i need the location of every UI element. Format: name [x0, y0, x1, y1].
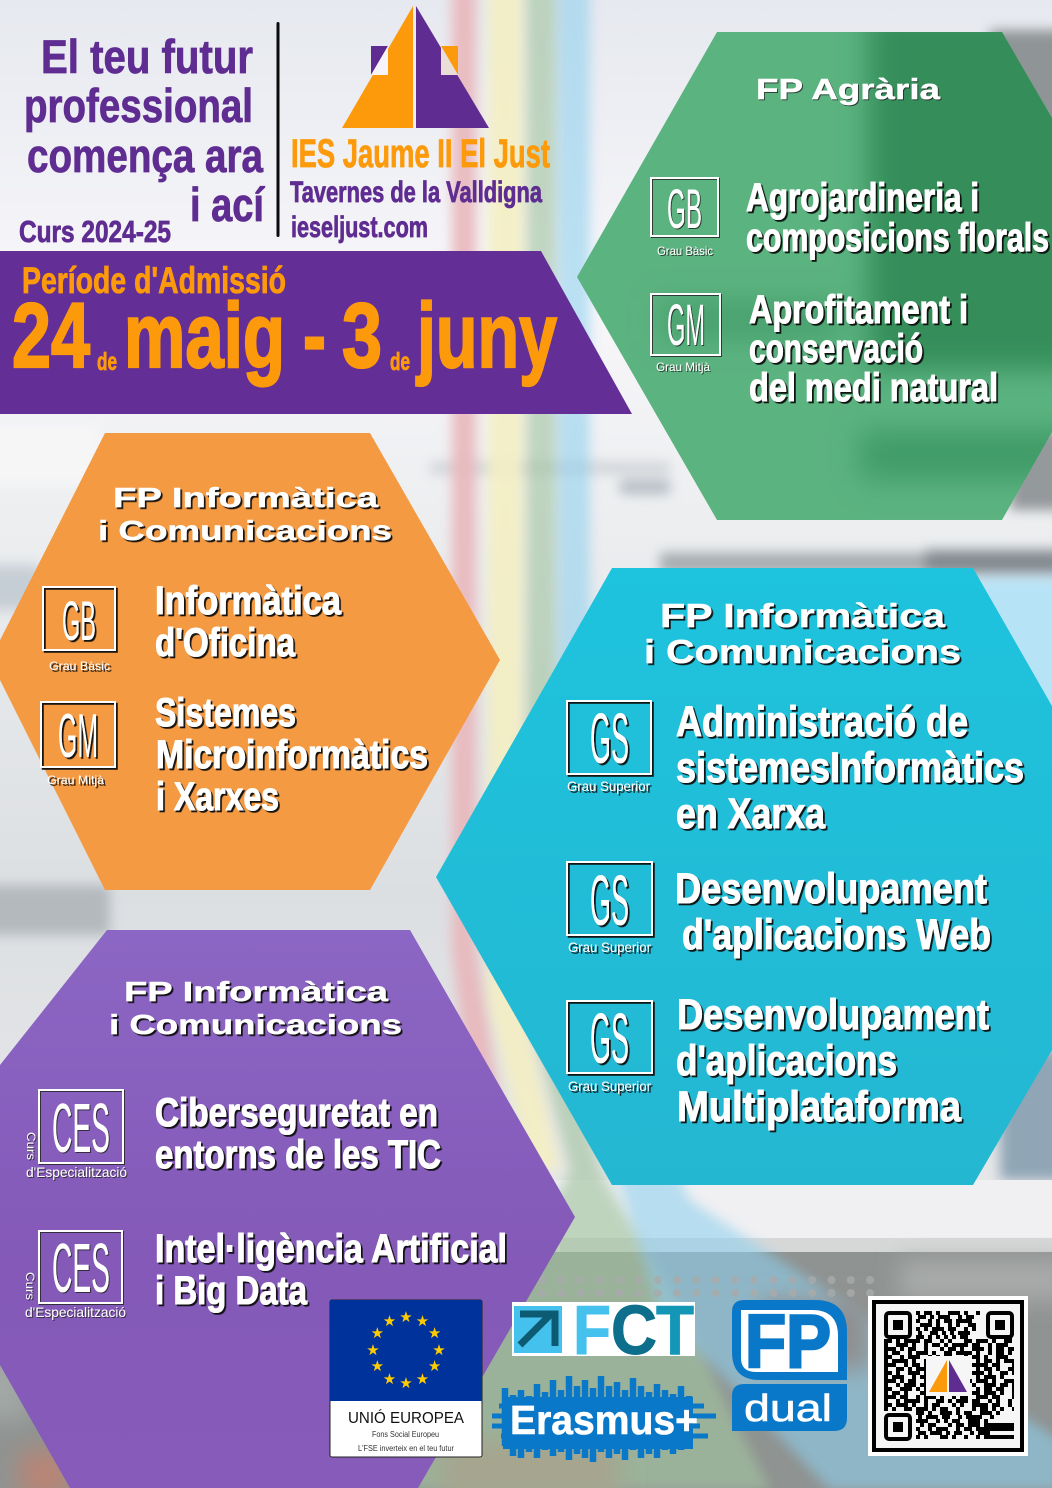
panel heading: informatica purple: FP Informàtica	[124, 976, 389, 1007]
course: aprofitament	[749, 288, 998, 410]
logo: Unio Europea: ★	[432, 1341, 446, 1359]
badge: grau superior 2	[567, 862, 652, 955]
badge: grau basic	[43, 587, 115, 673]
logo: FCT: C	[611, 1291, 657, 1369]
panel: FP Informatica orange	[0, 433, 500, 890]
logo: Unio Europea: ★	[428, 1324, 441, 1342]
badge: curs especialitzacio 2: Curs	[23, 1272, 37, 1300]
banner: admission period: 3	[342, 285, 382, 387]
badge: grau superior 1	[567, 700, 651, 794]
badge: curs especialitzacio 1: CES	[52, 1089, 110, 1167]
header: slogan: professional	[24, 79, 253, 132]
header: slogan: comença ara	[27, 129, 264, 182]
logo: Unio Europea: ★	[399, 1374, 413, 1392]
logo: Unio Europea: ★	[383, 1312, 396, 1330]
logo: Unio Europea: L'FSE inverteix en el teu futur	[358, 1444, 454, 1453]
banner: admission period: -	[303, 285, 326, 387]
course: aprofitament: conservació	[749, 327, 923, 371]
school name: IES Jaume II El Just	[291, 132, 550, 176]
badge: curs especialitzacio 1: Curs	[24, 1132, 38, 1160]
logo: Erasmus+: Erasmus+	[510, 1397, 698, 1443]
banner: admission period: de	[390, 348, 410, 376]
logo: Unio Europea: ★	[371, 1324, 384, 1342]
logo: Unio Europea: ★	[428, 1357, 441, 1375]
badge: grau basic: GB	[62, 589, 96, 652]
logo: Unio Europea: ★	[416, 1370, 429, 1388]
course: administracio: en Xarxa	[676, 790, 826, 838]
panel: FP Informatica cyan	[436, 568, 1052, 1185]
logo: Unio Europea	[330, 1300, 482, 1457]
panel heading: informatica orange: FP Informàtica	[113, 482, 379, 513]
panel heading: informatica orange	[98, 482, 392, 546]
badge: grau basic	[651, 177, 718, 258]
course: multiplataforma: d'aplicacions	[676, 1037, 897, 1085]
panel: FP Agraria	[577, 10, 1052, 520]
logo: FP dual: FP	[745, 1299, 831, 1383]
badge: grau superior 1: GS	[590, 700, 629, 779]
panel heading: informatica purple: i Comunicacions	[109, 1009, 402, 1040]
course: ciberseguretat: Ciberseguretat en	[155, 1091, 438, 1135]
header: slogan: i ací	[190, 178, 266, 231]
course: intel-ligencia artificial: i Big Data	[155, 1269, 308, 1313]
banner: admission period: maig	[124, 285, 285, 387]
badge: curs especialitzacio 2	[23, 1229, 126, 1320]
badge: grau basic: GB	[667, 177, 702, 240]
badge: curs especialitzacio 2: CES	[52, 1229, 110, 1307]
logo: FCT: F	[573, 1291, 611, 1369]
course: ofimatica: d'Oficina	[155, 621, 296, 665]
school name	[290, 132, 550, 244]
logo: Unio Europea: ★	[416, 1312, 429, 1330]
school name: ieseljust.com	[291, 211, 428, 244]
course: web: Desenvolupament	[675, 865, 987, 913]
course: intel-ligencia artificial: Intel·ligència Artificial	[155, 1227, 507, 1271]
course: multiplataforma: Desenvolupament	[677, 991, 989, 1039]
badge: grau superior 2: Grau Superior	[568, 939, 651, 955]
school year: Curs 2024-25	[19, 214, 171, 249]
course: agrojardineria: Agrojardineria i	[746, 176, 979, 220]
course: web	[675, 865, 991, 959]
vertical divider	[276, 22, 280, 237]
course: ciberseguretat	[155, 1091, 441, 1177]
panel heading: informatica purple	[109, 976, 402, 1040]
course: multiplataforma: Multiplataforma	[677, 1083, 962, 1131]
course: sistemes	[155, 691, 428, 819]
course: aprofitament: Aprofitament i	[749, 288, 968, 332]
banner: admission period: 24	[12, 285, 90, 387]
course: administracio: Administració de	[676, 698, 968, 746]
header: slogan	[24, 30, 266, 231]
course: intel-ligencia artificial	[155, 1227, 507, 1313]
badge: grau superior 3: Grau Superior	[568, 1078, 651, 1094]
course: web: d'aplicacions Web	[682, 911, 991, 959]
logo: Unio Europea: Fons Social Europeu	[372, 1430, 439, 1439]
badge: grau mitja	[41, 702, 115, 787]
panel heading: informatica cyan	[644, 597, 961, 670]
course: sistemes: i Xarxes	[156, 775, 279, 819]
logo: Erasmus+	[492, 1376, 716, 1462]
course: ofimatica	[155, 579, 342, 665]
course: ofimatica: Informàtica	[155, 579, 342, 623]
badge: grau basic: Grau Bàsic	[49, 659, 110, 673]
badge: curs especialitzacio 2: d'Especialització	[25, 1304, 126, 1320]
course: agrojardineria	[746, 176, 1049, 260]
panel heading: informatica orange: i Comunicacions	[98, 515, 392, 546]
course: sistemes: Sistemes	[155, 691, 296, 735]
badge: grau basic: Grau Bàsic	[657, 244, 713, 258]
badge: grau mitja: GM	[667, 293, 705, 358]
badge: grau superior 1: Grau Superior	[567, 778, 650, 794]
logo: FCT	[512, 1291, 695, 1369]
QR code	[868, 1296, 1028, 1456]
banner: admission period: juny	[416, 285, 557, 387]
logo: Unio Europea: ★	[383, 1370, 396, 1388]
panel heading: informatica cyan: i Comunicacions	[644, 633, 961, 670]
badge: curs especialitzacio 1: d'Especialització	[26, 1164, 127, 1180]
panel heading: agraria: FP Agrària	[756, 74, 941, 106]
banner: admission period: de	[97, 348, 117, 376]
logo: Unio Europea: ★	[399, 1308, 413, 1326]
banner: admission period: Període d'Admissió	[22, 260, 286, 301]
badge: grau mitja: Grau Mitjà	[47, 773, 104, 787]
logo: Unio Europea: ★	[371, 1357, 384, 1375]
logo: FP dual	[732, 1299, 847, 1431]
course: multiplataforma	[676, 991, 989, 1131]
panel heading: informatica cyan: FP Informàtica	[660, 597, 946, 634]
badge: grau mitja: Grau Mitjà	[656, 360, 710, 374]
logo: Unio Europea: ★	[366, 1341, 380, 1359]
school logo: pyramid	[342, 6, 489, 128]
badge: grau superior 3: GS	[590, 1000, 629, 1079]
badge: grau superior 3	[567, 1000, 652, 1094]
panel: FP Informatica purple	[0, 930, 575, 1488]
course: sistemes: Microinformàtics	[156, 733, 428, 777]
course: aprofitament: del medi natural	[749, 366, 998, 410]
logo: FP dual: dual	[744, 1388, 832, 1430]
badge: curs especialitzacio 1	[24, 1089, 127, 1180]
school name: Tavernes de la Valldigna	[290, 176, 542, 209]
logo: Unio Europea: UNIÓ EUROPEA	[348, 1408, 464, 1427]
banner: admission period	[0, 251, 632, 414]
course: ciberseguretat: entorns de les TIC	[155, 1133, 441, 1177]
badge: grau mitja	[651, 293, 720, 374]
badge: grau superior 2: GS	[590, 862, 629, 941]
badge: grau mitja: GM	[58, 702, 98, 771]
logo: FCT: T	[656, 1291, 694, 1369]
header: slogan: El teu futur	[41, 30, 253, 83]
course: administracio	[676, 698, 1024, 838]
